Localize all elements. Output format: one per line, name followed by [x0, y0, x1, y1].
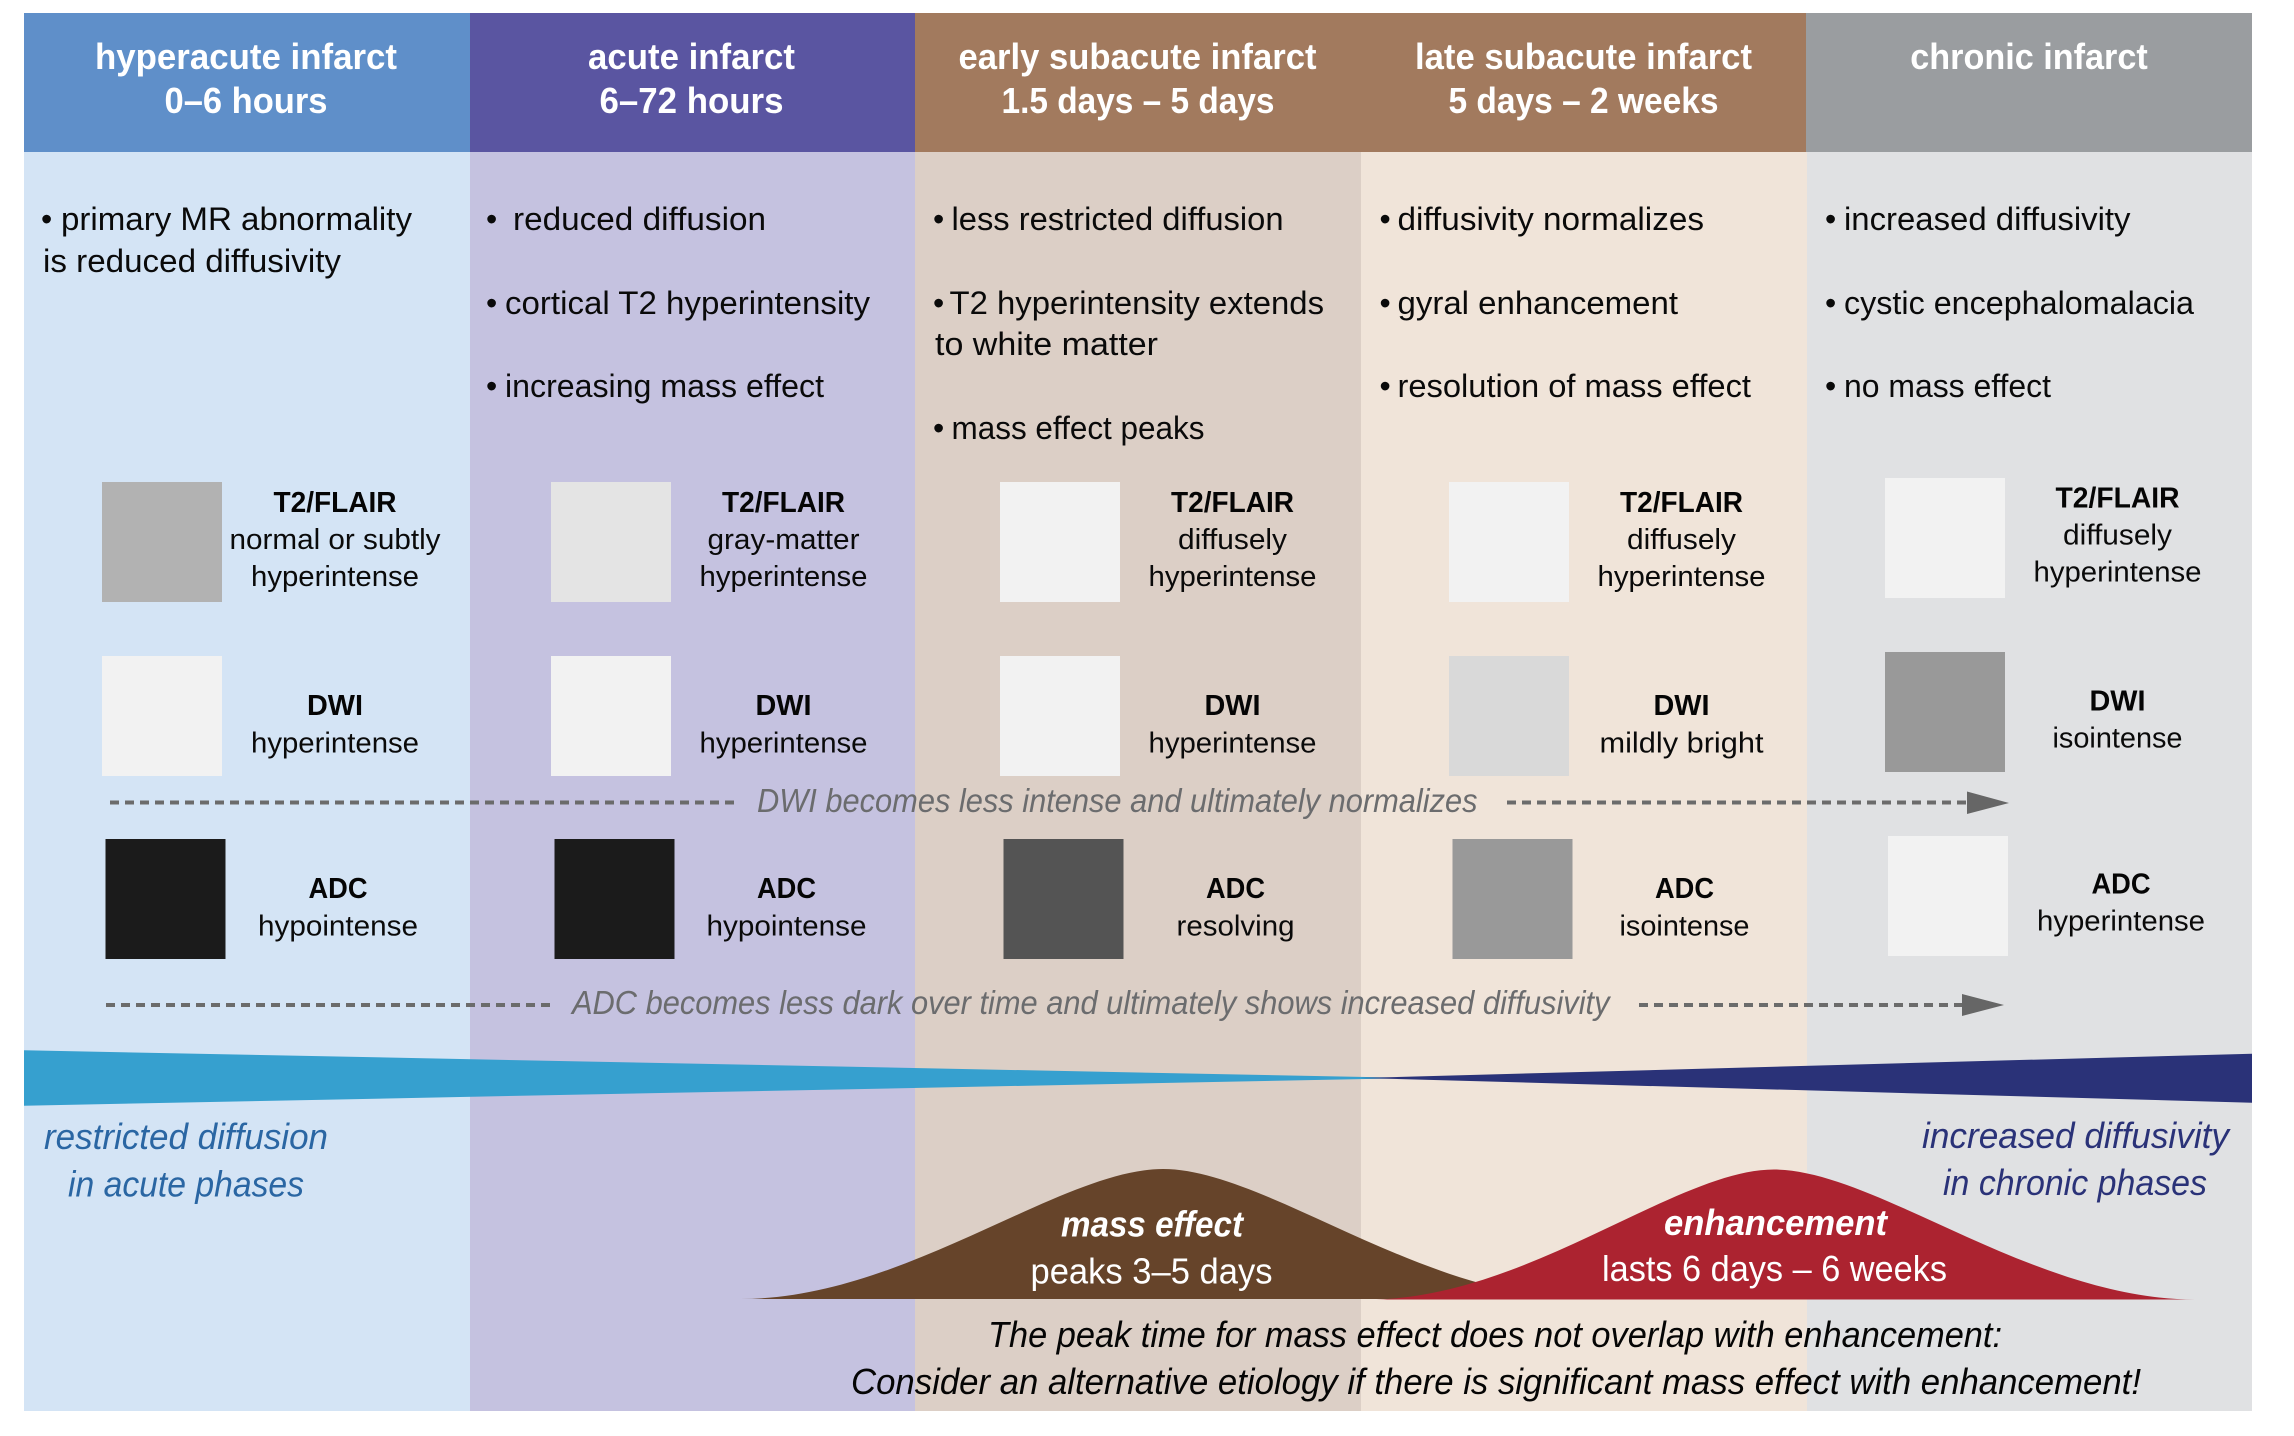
text block: acute findings	[486, 201, 870, 404]
panel: hyperacute infarct column	[24, 13, 470, 1411]
text block: early subacute findings: to white matter	[935, 326, 1158, 362]
icon: T2/FLAIR swatch	[1000, 482, 1120, 602]
text block: T2/FLAIR label: hyperintense	[1598, 561, 1766, 593]
text block: DWI label	[251, 690, 419, 760]
icon: T2/FLAIR swatch	[551, 482, 671, 602]
text block: DWI label	[700, 690, 868, 760]
icon: T2/FLAIR swatch	[1885, 478, 2005, 598]
panel: chronic infarct column	[1806, 13, 2252, 1411]
text block: ADC label: ADC	[1655, 873, 1714, 905]
text block: DWI label: DWI	[1654, 690, 1710, 722]
text block: DWI label: isointense	[2052, 722, 2182, 754]
text block: T2/FLAIR label: hyperintense	[2034, 556, 2202, 588]
text block: ADC label: isointense	[1620, 910, 1750, 942]
text block: DWI label: hyperintense	[1148, 728, 1316, 760]
icon: ADC swatch	[106, 839, 226, 959]
text block: T2/FLAIR label: normal or subtly	[230, 524, 441, 556]
text block: chronic findings	[1825, 201, 2194, 404]
text block: early subacute findings: •	[933, 285, 944, 321]
text block: ADC label: resolving	[1176, 910, 1294, 942]
arrow: DWI trend: DWI becomes less intense and ultimately normalizes	[757, 782, 1478, 819]
text block: late subacute findings: resolution of mass effect	[1398, 368, 1751, 404]
label: restricted diffusion: restricted diffusion	[44, 1116, 328, 1157]
header: chronic infarct	[1806, 13, 2252, 152]
chart: enhancement bell curve: enhancement	[1664, 1202, 1889, 1243]
header: hyperacute infarct: hyperacute infarct	[95, 36, 397, 77]
panel: early subacute infarct column	[915, 13, 1361, 1411]
text block: chronic findings: increased diffusivity	[1844, 201, 2130, 237]
text block: DWI label: DWI	[756, 690, 812, 722]
text block: T2/FLAIR label: gray-matter	[708, 524, 860, 556]
text block: DWI label: DWI	[307, 690, 363, 722]
text block: T2/FLAIR label: diffusely	[1178, 524, 1288, 556]
header: early subacute infarct: early subacute infarct	[958, 36, 1317, 77]
icon: T2/FLAIR swatch	[1449, 482, 1569, 602]
text block: T2/FLAIR label: diffusely	[1627, 524, 1737, 556]
text block: DWI label: DWI	[2090, 686, 2146, 718]
wedge: increased diffusivity growing	[1361, 1054, 2252, 1103]
text block: T2/FLAIR label	[230, 487, 441, 593]
text block: hyperacute findings: •	[41, 201, 52, 237]
text block: DWI label	[1148, 690, 1316, 760]
text block: chronic findings: no mass effect	[1844, 368, 2051, 404]
text block: ADC label: hyperintense	[2037, 906, 2205, 938]
text block: acute findings: cortical T2 hyperintensity	[505, 285, 870, 321]
text block: ADC label: ADC	[308, 873, 368, 905]
text block: T2/FLAIR label: T2/FLAIR	[722, 487, 845, 519]
panel: acute infarct column	[470, 13, 915, 1411]
icon: ADC swatch	[1888, 836, 2008, 956]
text block: DWI label: DWI	[1204, 690, 1260, 722]
text block: acute findings: reduced diffusion	[513, 201, 766, 237]
text block: hyperacute findings: is reduced diffusivity	[43, 243, 341, 279]
text block: early subacute findings: •	[933, 201, 944, 237]
text block: chronic findings: •	[1825, 201, 1836, 237]
text block: ADC label	[1620, 873, 1750, 942]
text block: acute findings: increasing mass effect	[505, 368, 824, 404]
callout: clinical note: Consider an alternative etiology if there is significant mass effect with enhancement!	[851, 1361, 2141, 1402]
text block: early subacute findings: T2 hyperintensity extends	[950, 285, 1324, 321]
text block: late subacute findings: •	[1380, 368, 1391, 404]
text block: T2/FLAIR label: T2/FLAIR	[274, 487, 397, 519]
arrow: ADC trend: ADC becomes less dark over time and ultimately shows increased diffusivity	[570, 984, 1612, 1021]
text block: ADC label: ADC	[757, 873, 816, 905]
text block: late subacute findings: •	[1380, 201, 1391, 237]
icon: ADC swatch	[1452, 839, 1572, 959]
text block: DWI label: hyperintense	[700, 728, 868, 760]
chart: enhancement bell curve: lasts 6 days – 6 weeks	[1602, 1248, 1947, 1289]
text block: ADC label	[258, 873, 418, 942]
callout: clinical note	[851, 1314, 2141, 1402]
label: restricted diffusion: in acute phases	[68, 1164, 304, 1204]
header: early subacute infarct	[915, 13, 1361, 152]
text block: late subacute findings	[1380, 201, 1751, 404]
arrow: DWI trend	[110, 782, 2009, 819]
text block: acute findings: •	[486, 368, 497, 404]
text block: T2/FLAIR label	[700, 487, 868, 593]
text block: T2/FLAIR label: hyperintense	[251, 561, 419, 593]
chart: mass effect bell curve: peaks 3–5 days	[1030, 1250, 1272, 1292]
text block: late subacute findings: gyral enhancement	[1398, 285, 1678, 321]
icon: ADC swatch	[554, 839, 674, 959]
text block: DWI label	[1600, 690, 1764, 760]
icon: DWI swatch	[1449, 656, 1569, 776]
icon: DWI swatch	[102, 656, 222, 776]
header: late subacute infarct: late subacute infarct	[1415, 36, 1752, 77]
text block: DWI label: mildly bright	[1600, 728, 1764, 760]
text block: early subacute findings: •	[933, 410, 944, 446]
text block: acute findings: •	[486, 285, 497, 321]
chart: enhancement bell curve	[1369, 1170, 2195, 1300]
label: increased diffusivity	[1922, 1115, 2231, 1203]
header: acute infarct	[470, 13, 915, 152]
text block: late subacute findings: diffusivity normalizes	[1398, 201, 1704, 237]
text block: late subacute findings: •	[1380, 285, 1391, 321]
text block: ADC label: hypointense	[706, 910, 866, 942]
header: early subacute infarct: 1.5 days – 5 days	[1002, 80, 1274, 121]
icon: DWI swatch	[551, 656, 671, 776]
text block: ADC label: hypointense	[258, 910, 418, 942]
chart: mass effect bell curve: mass effect	[1061, 1204, 1245, 1244]
text block: DWI label: hyperintense	[251, 728, 419, 760]
text block: ADC label: ADC	[1206, 873, 1265, 905]
text block: ADC label	[2037, 868, 2205, 938]
text block: early subacute findings: mass effect peaks	[952, 410, 1204, 446]
text block: early subacute findings	[933, 201, 1324, 446]
header: acute infarct: 6–72 hours	[600, 80, 784, 121]
text block: ADC label	[706, 873, 866, 942]
label: increased diffusivity: in chronic phases	[1943, 1162, 2207, 1203]
callout: clinical note: The peak time for mass effect does not overlap with enhancement:	[988, 1314, 2002, 1355]
icon: T2/FLAIR swatch	[102, 482, 222, 602]
text block: T2/FLAIR label	[2034, 482, 2202, 588]
text block: chronic findings: cystic encephalomalacia	[1844, 285, 2194, 321]
icon: DWI swatch	[1885, 652, 2005, 772]
text block: hyperacute findings	[41, 201, 412, 279]
text block: T2/FLAIR label: diffusely	[2063, 520, 2173, 552]
label: restricted diffusion	[44, 1116, 328, 1204]
header: acute infarct: acute infarct	[588, 36, 795, 77]
text block: hyperacute findings: primary MR abnormality	[61, 201, 412, 237]
text block: T2/FLAIR label	[1148, 487, 1316, 593]
text block: T2/FLAIR label: hyperintense	[700, 561, 868, 593]
text block: acute findings: •	[486, 201, 497, 237]
header: chronic infarct: chronic infarct	[1910, 36, 2148, 77]
icon: ADC swatch	[1004, 839, 1124, 959]
wedge: restricted diffusion tapering	[24, 1050, 1415, 1106]
text block: T2/FLAIR label: hyperintense	[1148, 561, 1316, 593]
text block: T2/FLAIR label: T2/FLAIR	[1620, 487, 1743, 519]
icon: DWI swatch	[1000, 656, 1120, 776]
text block: T2/FLAIR label: T2/FLAIR	[1171, 487, 1294, 519]
arrow: ADC trend	[106, 984, 2004, 1021]
header: hyperacute infarct	[24, 13, 470, 152]
text block: DWI label	[2052, 686, 2182, 754]
text block: T2/FLAIR label: T2/FLAIR	[2056, 482, 2180, 514]
text block: T2/FLAIR label	[1598, 487, 1766, 593]
header: hyperacute infarct: 0–6 hours	[164, 80, 328, 121]
label: increased diffusivity: increased diffusivity	[1922, 1115, 2231, 1156]
chart: mass effect bell curve	[741, 1169, 1585, 1299]
text block: chronic findings: •	[1825, 368, 1836, 404]
text block: ADC label	[1176, 873, 1294, 942]
text block: chronic findings: •	[1825, 285, 1836, 321]
panel: late subacute infarct column	[1361, 13, 1807, 1411]
text block: ADC label: ADC	[2092, 868, 2151, 900]
header: late subacute infarct	[1361, 13, 1807, 152]
text block: early subacute findings: less restricted diffusion	[952, 201, 1284, 237]
header: late subacute infarct: 5 days – 2 weeks	[1448, 80, 1718, 121]
